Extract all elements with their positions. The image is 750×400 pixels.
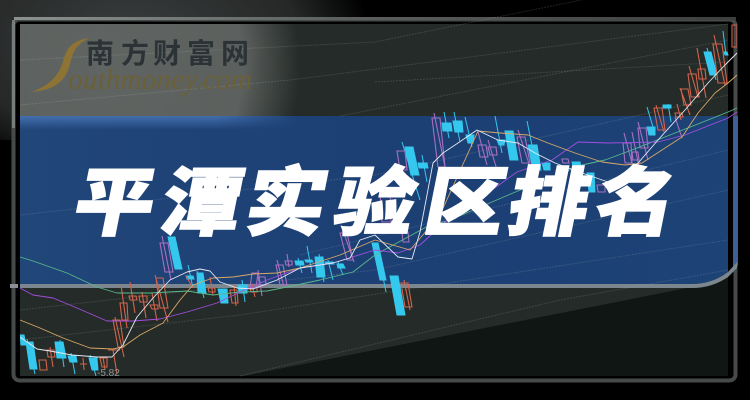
pink candles inside band — [160, 113, 682, 296]
moving average lines — [12, 53, 737, 357]
line: orange MA — [12, 75, 737, 349]
icon: gold S swoosh — [32, 38, 90, 92]
text: chart price label: -5.82 — [97, 368, 120, 379]
title: 平潭实验区排名 — [67, 161, 685, 245]
dark lower-right wedge — [243, 278, 728, 376]
logo chinese name: 南方财富网 — [86, 37, 249, 69]
band top-left highlight — [20, 116, 286, 128]
line: white MA — [12, 53, 737, 357]
line: purple MA — [20, 112, 737, 321]
top-left glow overlay behind logo — [20, 24, 292, 116]
logo latin name: outhmoney.com — [68, 63, 252, 96]
blue title band — [20, 116, 728, 284]
band lower edge stripe — [20, 262, 737, 288]
logo: southmoney — [32, 37, 252, 96]
line: teal MA — [20, 108, 737, 295]
